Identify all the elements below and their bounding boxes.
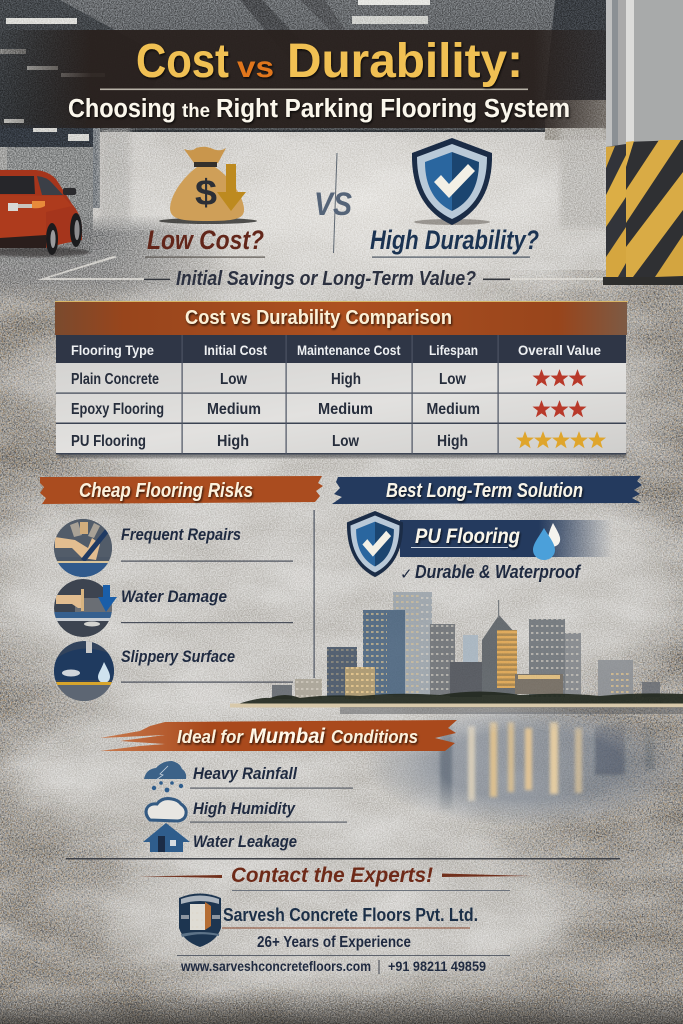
panel: cost vs durability comparison (55, 301, 628, 458)
row: PU flooring: High (437, 433, 468, 450)
row: PU flooring: PU Flooring (71, 433, 146, 450)
red car (0, 170, 90, 257)
table header row: Lifespan (429, 343, 478, 358)
panel: best long-term solution (332, 476, 642, 583)
text: durable and waterproof: Durable & Waterproof (415, 561, 582, 582)
panel: cheap flooring risks (40, 476, 323, 701)
icon: high humidity cloud (146, 799, 186, 821)
row: PU flooring (71, 431, 606, 450)
vs divider (314, 153, 353, 253)
banner: ideal for Mumbai conditions: Conditions (331, 726, 418, 747)
banner: best long-term solution: Best Long-Term Solution (386, 480, 583, 502)
icon: heavy rainfall cloud (144, 761, 186, 792)
title: Cost vs Durability: vs (237, 51, 274, 84)
icon: frequent repairs (54, 519, 114, 577)
banner: ideal for Mumbai conditions: Mumbai (249, 725, 326, 748)
label: heavy rainfall: Heavy Rainfall (193, 765, 297, 783)
row: plain concrete: Plain Concrete (71, 371, 159, 388)
list: Mumbai conditions (143, 761, 353, 852)
row: epoxy flooring: Medium (426, 401, 480, 418)
heading: contact the experts: Contact the Experts! (231, 863, 433, 887)
row: plain concrete (71, 369, 586, 388)
city skyline (230, 592, 683, 708)
row: epoxy flooring: Medium (207, 401, 261, 418)
banner: ideal for Mumbai conditions (100, 720, 457, 751)
table header row: Maintenance Cost (297, 343, 401, 358)
row: plain concrete: Low (439, 371, 467, 388)
row: epoxy flooring: Medium (318, 401, 373, 418)
row: epoxy flooring: Epoxy Flooring (71, 401, 164, 418)
label: water damage: Water Damage (121, 587, 227, 606)
table header row: Overall Value (518, 343, 601, 358)
icon: water leakage house (143, 823, 190, 852)
logo: Sarvesh shield (179, 894, 221, 947)
comparison heading: Cost vs Durability Comparison (185, 307, 452, 329)
icon: money bag with down arrow (159, 147, 257, 224)
banner: cheap flooring risks: Cheap Flooring Risks (79, 480, 253, 502)
company name: Sarvesh Concrete Floors Pvt. Ltd. (223, 905, 478, 925)
title: Cost vs Durability: Durability: (287, 35, 523, 88)
table header row: Flooring Type (71, 343, 154, 358)
text: durable and waterproof: ✓ (400, 565, 413, 583)
row: epoxy flooring (71, 400, 586, 418)
water reflection of the city (340, 707, 683, 827)
comparison table (56, 335, 626, 458)
subtitle: Choosing (68, 95, 176, 123)
banner: cheap flooring risks (40, 476, 323, 504)
question line: initial savings or long-term value: Initial Savings or Long-Term Value? (176, 268, 476, 290)
subtitle: Right Parking Flooring System (216, 95, 570, 123)
row: PU flooring: Low (332, 433, 360, 450)
panel: contact the experts (138, 863, 532, 974)
label: high humidity: High Humidity (193, 800, 296, 818)
icon: money bag with down arrow: $ (195, 172, 217, 213)
PU flooring band (400, 520, 613, 557)
row: plain concrete: High (331, 371, 361, 388)
pillar with yellow and black hazard stripes (603, 0, 683, 285)
subtitle (68, 95, 570, 123)
title: Cost vs Durability: Cost (136, 35, 229, 88)
label: frequent repairs: Frequent Repairs (121, 525, 241, 544)
heading: Low Cost?: Low Cost? (147, 225, 264, 255)
icon: water drops (533, 523, 560, 560)
table header row: Initial Cost (204, 343, 267, 358)
vs divider: VS (314, 186, 353, 222)
contact details: website and phone: www.sarveshconcretefloors.com (180, 959, 371, 974)
text: years of experience: 26+ Years of Experience (257, 934, 411, 951)
title: Cost vs Durability (136, 35, 523, 88)
banner: ideal for Mumbai conditions: Ideal for (177, 726, 245, 747)
heading: contact the experts (138, 863, 532, 891)
label: water leakage: Water Leakage (193, 833, 297, 851)
banner: best long-term solution (332, 476, 642, 504)
icon: slippery surface (54, 641, 114, 701)
contact details: website and phone (180, 959, 486, 974)
PU flooring band: PU Flooring (415, 525, 520, 548)
contact details: website and phone: +91 98211 49859 (388, 959, 486, 974)
icon: PU flooring shield (347, 511, 403, 577)
row: plain concrete: Low (220, 371, 248, 388)
icon: water damage (54, 579, 117, 637)
heading: High Durability?: High Durability? (370, 225, 539, 255)
title banner (0, 30, 606, 128)
comparison heading (55, 302, 627, 335)
label: slippery surface: Slippery Surface (121, 647, 235, 666)
icon: durability shield (412, 138, 492, 225)
subtitle: the (182, 101, 210, 122)
row: PU flooring: High (217, 433, 249, 450)
table header row (71, 343, 601, 358)
